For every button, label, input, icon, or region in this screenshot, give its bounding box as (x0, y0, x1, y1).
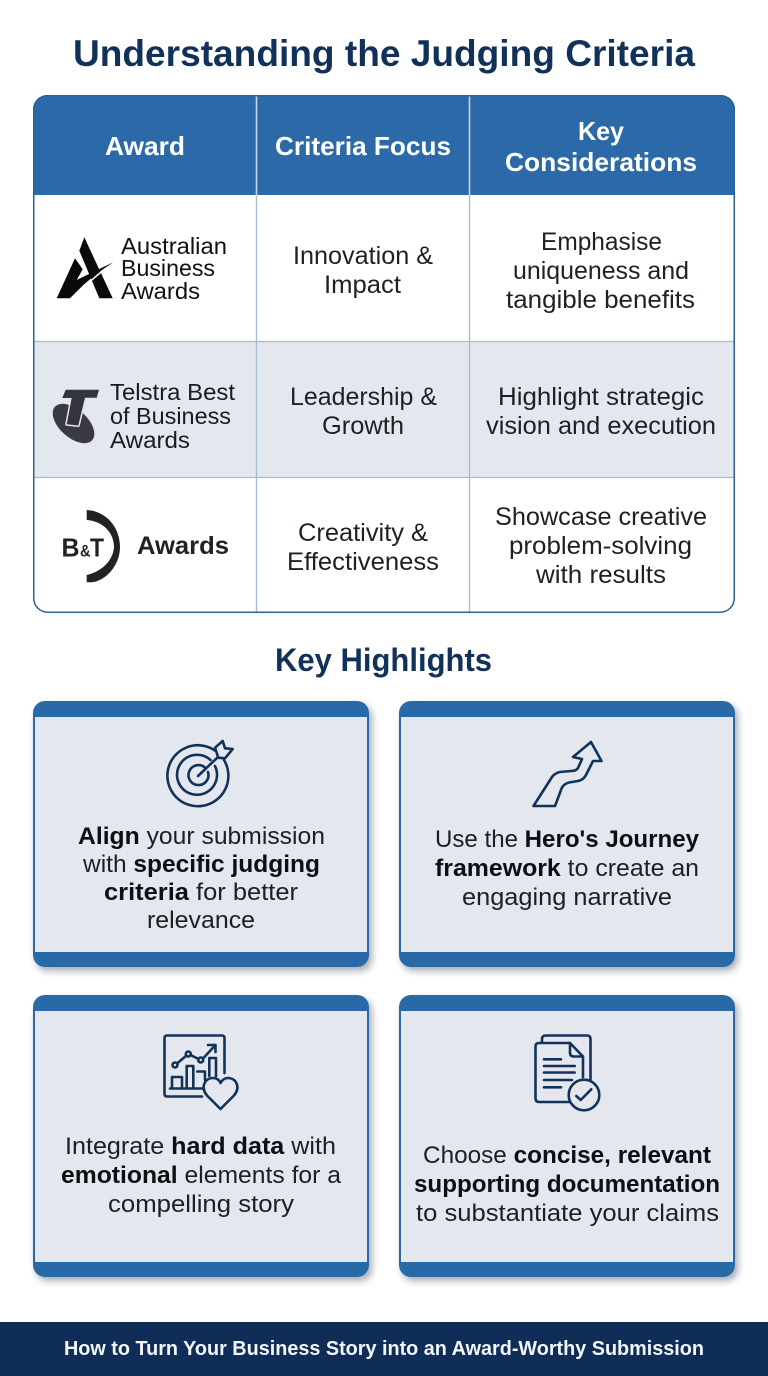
card: supporting documentation: supporting documentation (414, 1171, 720, 1198)
card: hero's journey (399, 701, 735, 967)
cell: considerations row 3: with results (535, 561, 666, 589)
cell: criteria row 3: Effectiveness (287, 548, 439, 576)
logo: Telstra Best of Business Awards (46, 379, 236, 453)
heading: key highlights: Key Highlights (275, 642, 492, 678)
icon: target with arrow (167, 741, 233, 806)
card text: Use the Hero's Journey (435, 826, 699, 853)
card text: Align your submission (78, 823, 325, 850)
cell: considerations row 3 (495, 503, 707, 589)
logo: Australian Business Awards (57, 233, 227, 304)
table header: award: Award (105, 131, 185, 161)
card: align submission (33, 701, 369, 967)
icon: document with check (536, 1036, 599, 1110)
card: hero's journey: engaging narrative (462, 884, 672, 911)
cell: criteria row 1: Impact (324, 271, 401, 299)
card text: Integrate hard data with (65, 1133, 336, 1160)
logo: Australian Business Awards: Awards (121, 278, 200, 304)
card: hard data: compelling story (108, 1191, 295, 1218)
cell: criteria row 3: Creativity & (298, 519, 428, 547)
table header: key considerations: Considerations (505, 147, 697, 177)
logo: Telstra Best of Business Awards: Telstra Best (110, 379, 236, 405)
cell: considerations row 1 (506, 228, 695, 314)
logo: Telstra Best of Business Awards: Awards (110, 427, 190, 453)
logo: Australian Business Awards: Australian (121, 233, 227, 259)
cell: considerations row 1: Emphasise (541, 228, 662, 256)
logo: Australian Business Awards: Business (121, 255, 215, 281)
cell: criteria row 3 (287, 519, 439, 576)
title: Understanding the Judging Criteria (73, 32, 696, 74)
card: hero's journey: framework to create an (435, 855, 699, 882)
card: hard data: emotional elements for a (61, 1162, 341, 1189)
cell: considerations row 2: Highlight strategic (498, 383, 704, 411)
cell: considerations row 2 (486, 383, 716, 440)
cell: considerations row 1: uniqueness and (513, 257, 689, 285)
cell: considerations row 2: vision and execution (486, 412, 716, 440)
logo: B&T Awards: T (90, 532, 104, 562)
table header: key considerations (505, 116, 697, 177)
card: align submission: with specific judging (82, 851, 320, 878)
cell: criteria row 2: Growth (322, 412, 404, 440)
cell: considerations row 3: problem-solving (509, 532, 692, 560)
card text: Choose concise, relevant (423, 1142, 711, 1169)
logo: B&T Awards: & (80, 542, 90, 560)
cell: considerations row 1: tangible benefits (506, 286, 695, 314)
card: supporting documentation: to substantiate your claims (416, 1200, 719, 1227)
card: supporting documentation (399, 995, 735, 1277)
cell: criteria row 2: Leadership & (290, 383, 437, 411)
logo: B&T Awards: Awards (137, 532, 229, 560)
cell: considerations row 3: Showcase creative (495, 503, 707, 531)
cell: criteria row 1 (293, 242, 433, 299)
panel: criteria table (33, 95, 735, 613)
footer banner (0, 1322, 768, 1376)
table header: key considerations: Key (578, 116, 625, 146)
cell: criteria row 1: Innovation & (293, 242, 433, 270)
logo: B&T Awards (62, 510, 229, 582)
logo: Telstra Best of Business Awards: of Business (110, 403, 231, 429)
cell: criteria row 2 (290, 383, 437, 440)
footer banner: How to Turn Your Business Story into an Award-Worthy Submission (64, 1338, 704, 1360)
table header: criteria focus: Criteria Focus (275, 131, 451, 161)
card: align submission: criteria for better (104, 879, 298, 906)
icon: winding arrow (534, 742, 602, 806)
card: align submission: relevance (147, 907, 255, 934)
card: hard data (33, 995, 369, 1277)
icon: chart with heart (164, 1036, 237, 1109)
logo: B&T Awards: B (62, 532, 80, 562)
